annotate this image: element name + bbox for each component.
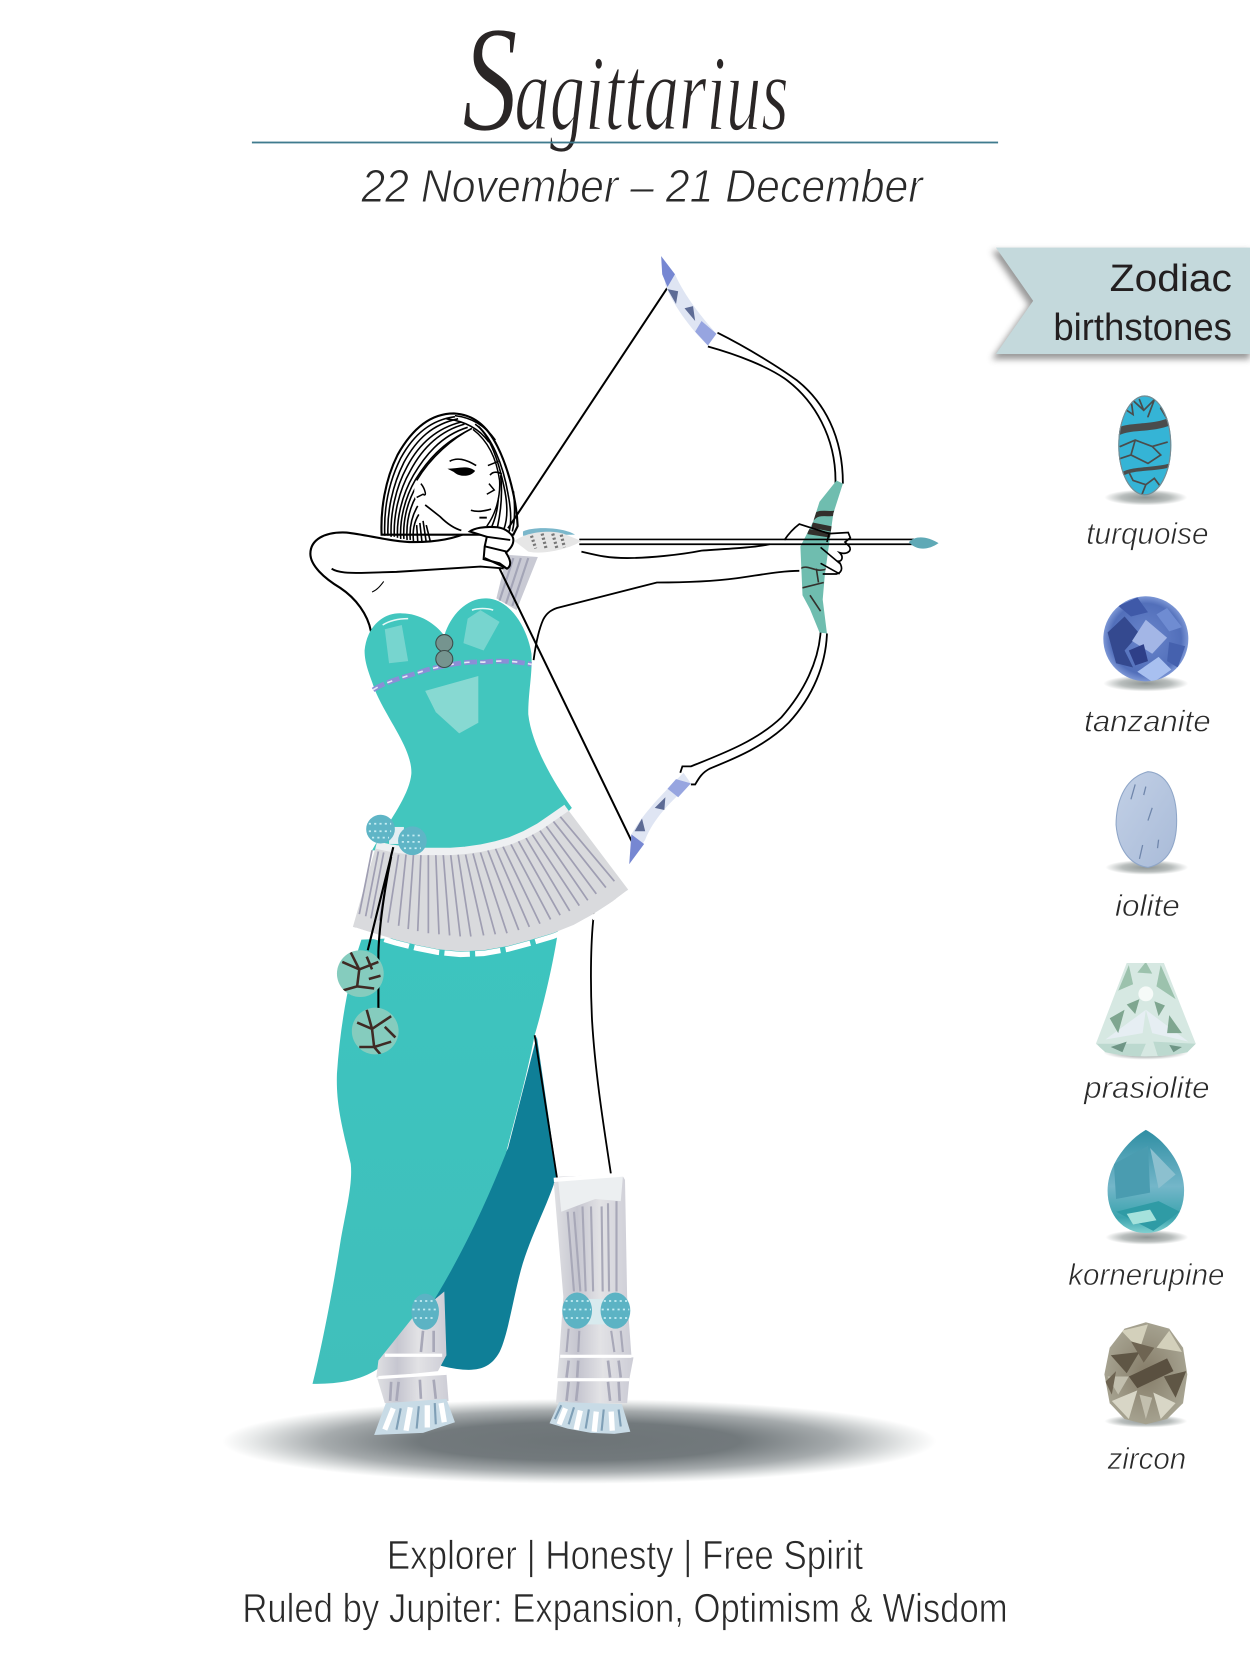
label: zircon: zircon [1107, 1441, 1186, 1476]
title: S [462, 0, 518, 163]
bow hand [784, 524, 850, 574]
right boot [550, 1175, 634, 1434]
gem: zircon [1104, 1322, 1187, 1428]
bow tip: upper gem [661, 256, 716, 345]
gem: prasiolite [1096, 962, 1196, 1060]
dress lower: dark lining [430, 1036, 557, 1370]
bow tip: lower gem [629, 773, 691, 864]
gem: kornerupine [1105, 1130, 1188, 1245]
bow string [500, 280, 673, 847]
gem: tanzanite [1103, 596, 1188, 691]
bow [629, 256, 850, 864]
infographic: Sagittarius zodiac birthstones [232, 30, 1250, 1630]
drawing hand [470, 527, 513, 569]
banner: Zodiac birthstones [992, 248, 1250, 359]
label: turquoise: turquoise [1086, 516, 1209, 551]
gem: turquoise [1104, 395, 1187, 505]
arrow [514, 528, 939, 553]
ruling planet line: Ruled by Jupiter: Expansion, Optimism & Wisdom [242, 1585, 1008, 1631]
label: tanzanite: tanzanite [1084, 703, 1211, 738]
bow upper limb [708, 333, 843, 484]
hair [381, 413, 518, 542]
face [414, 428, 502, 530]
banner: Zodiac birthstones: birthstones [1053, 306, 1232, 349]
back arm and shoulder [310, 531, 799, 661]
gem ruffle belt [353, 808, 628, 955]
bow lower limb [680, 632, 827, 784]
title [462, 0, 789, 163]
pendant cords [368, 847, 393, 1010]
label: prasiolite: prasiolite [1083, 1070, 1210, 1105]
floor shadow [222, 1399, 936, 1484]
brooch stones [436, 635, 453, 668]
dress lower: main skirt [312, 931, 558, 1384]
label: iolite: iolite [1115, 888, 1180, 923]
leg lines [535, 912, 611, 1178]
left boot [374, 1291, 455, 1435]
label: kornerupine: kornerupine [1068, 1257, 1224, 1292]
title: agittarius [514, 34, 789, 154]
traits line: Explorer | Honesty | Free Spirit [387, 1532, 863, 1578]
gem necklace band [373, 661, 531, 690]
banner: Zodiac birthstones: Zodiac [1110, 257, 1232, 300]
title rule [252, 142, 998, 143]
date range: 22 November – 21 December [360, 160, 925, 212]
gem: iolite [1105, 772, 1188, 875]
pendant stones [337, 950, 399, 1054]
dress bodice [365, 598, 572, 850]
waist bow [366, 815, 427, 855]
bow grip [800, 480, 843, 634]
front arm [534, 544, 799, 660]
gem strap behind shoulder [496, 555, 538, 610]
figure: archer [310, 256, 939, 1435]
